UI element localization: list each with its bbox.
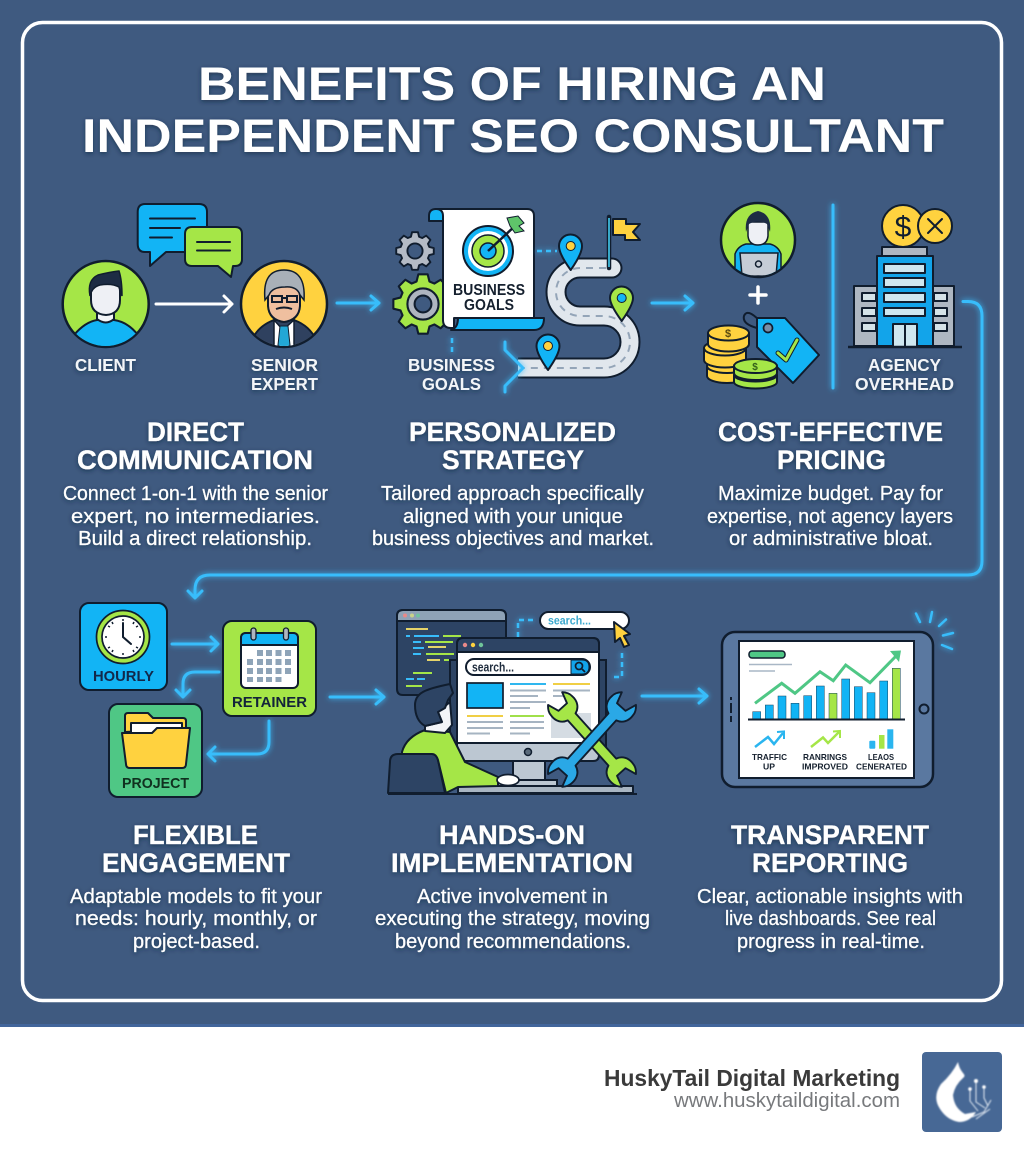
arrow: client to expert: [156, 296, 232, 312]
heading: cost-effective pricing: COST-EFFECTIVE: [718, 417, 943, 447]
panel: hands-on implementation: [375, 610, 650, 953]
text: cost-effective pricing description: [707, 483, 953, 550]
icon: green coin stack: $: [752, 362, 758, 373]
dashed connectors: [518, 620, 622, 677]
icon: code window: [397, 610, 506, 695]
text: flexible engagement description: Adaptable models to fit your: [70, 886, 322, 908]
text: flexible engagement description: needs: hourly, monthly, or: [75, 908, 317, 930]
text: hands-on implementation description: executing the strategy, moving: [375, 908, 650, 930]
label: agency overhead: OVERHEAD: [855, 374, 954, 394]
icon: senior expert avatar: [241, 261, 327, 352]
panel: flexible engagement: [70, 603, 322, 953]
card: hourly: HOURLY: [93, 668, 154, 685]
heading: hands-on implementation: HANDS-ON: [439, 820, 585, 850]
heading: cost-effective pricing: PRICING: [777, 445, 886, 475]
heading: transparent reporting: REPORTING: [752, 848, 908, 878]
tablet labels: UP: [763, 762, 775, 772]
footer band edge: [0, 1024, 1024, 1027]
icon: leads bars: [869, 729, 893, 749]
text: hands-on implementation description: [375, 886, 650, 953]
heading: hands-on implementation: [391, 820, 633, 878]
icon: agency building: [848, 247, 962, 347]
label: business goals: GOALS: [422, 374, 481, 394]
icon: floating search bar: [540, 612, 630, 647]
brand url: www.huskytaildigital.com: [673, 1090, 900, 1112]
heading: direct communication: COMMUNICATION: [77, 445, 313, 475]
text: transparent reporting description: Clear, actionable insights with: [697, 886, 963, 908]
text: personalized strategy description: aligned with your unique: [403, 506, 623, 528]
label: senior expert: [251, 355, 318, 394]
brand name: HuskyTail Digital Marketing: [604, 1065, 900, 1091]
text: cost-effective pricing description: expertise, not agency layers: [707, 506, 953, 528]
text: hands-on implementation description: Active involvement in: [417, 886, 608, 908]
icon: yellow coin stack: [704, 326, 749, 383]
icon: map pins: [536, 234, 633, 370]
tablet labels: LEAOS: [868, 752, 894, 762]
icon: plus sign: [750, 287, 766, 303]
label: senior expert: EXPERT: [251, 374, 318, 394]
heading: flexible engagement: [102, 820, 290, 878]
panel: cost-effective pricing: [704, 203, 962, 550]
icon: monitor: [450, 638, 606, 786]
footer: brand: [604, 1052, 1002, 1132]
icon: sparkle rays: [916, 612, 953, 649]
heading: flexible engagement: FLEXIBLE: [133, 820, 258, 850]
icon: floating search bar: search...: [548, 614, 591, 628]
text: transparent reporting description: progress in real-time.: [737, 931, 925, 953]
icon: business goals scroll: GOALS: [464, 297, 514, 314]
text: cost-effective pricing description: Maximize budget. Pay for: [718, 483, 943, 505]
icon: business goals scroll: [429, 209, 544, 330]
icon: gears: [393, 232, 453, 334]
panel: transparent reporting: [697, 612, 963, 953]
text: transparent reporting description: [697, 886, 963, 953]
tablet labels: RANRINGS: [803, 752, 847, 762]
icon: crossed wrenches: [544, 689, 640, 790]
icon: price tag with check: [744, 313, 819, 383]
title: [82, 57, 944, 162]
panel: personalized strategy: [372, 209, 654, 550]
tablet labels: TRAFFIC: [752, 752, 787, 762]
heading: transparent reporting: TRANSPARENT: [731, 820, 929, 850]
icon: yellow coin stack: $: [725, 328, 731, 340]
icon: dollar and cross coins: [882, 205, 952, 247]
card: retainer: [223, 621, 316, 716]
panel: direct communication: [63, 204, 328, 550]
text: personalized strategy description: [372, 483, 654, 550]
text: flexible engagement description: [70, 886, 322, 953]
label: client: CLIENT: [75, 355, 136, 375]
icon: tablet dashboard: [722, 632, 933, 787]
dashed connectors to road: [452, 251, 557, 352]
flow connectors: [172, 205, 982, 761]
heading: flexible engagement: ENGAGEMENT: [102, 848, 290, 878]
icon: traffic up: [755, 732, 784, 747]
text: direct communication description: Build a direct relationship.: [78, 528, 312, 550]
label: business goals: [408, 355, 495, 394]
label: agency overhead: [855, 355, 954, 394]
bar chart: [753, 668, 900, 719]
heading: direct communication: DIRECT: [147, 417, 244, 447]
icon: winding road: [518, 258, 630, 368]
icon: consultant with laptop: [721, 203, 795, 277]
title: INDEPENDENT SEO CONSULTANT: [82, 109, 944, 162]
heading: hands-on implementation: IMPLEMENTATION: [391, 848, 633, 878]
icon: dollar and cross coins: $: [895, 211, 912, 244]
heading: cost-effective pricing: [718, 417, 943, 475]
chevron at road start: [505, 342, 523, 392]
icon: business goals scroll: BUSINESS: [453, 282, 525, 299]
label: senior expert: SENIOR: [251, 355, 318, 375]
icon: goal flag: [609, 217, 640, 268]
text: direct communication description: Connect 1-on-1 with the senior: [63, 483, 328, 505]
heading: personalized strategy: [409, 417, 616, 475]
icon: husky tail logo: [922, 1052, 1002, 1132]
title: BENEFITS OF HIRING AN: [198, 57, 826, 110]
text: cost-effective pricing description: or administrative bloat.: [729, 528, 933, 550]
icon: speech bubbles: [138, 204, 242, 277]
icon: person at desk: [388, 684, 637, 794]
text: direct communication description: [63, 483, 328, 550]
icon: green coin stack: [734, 359, 777, 389]
text: flexible engagement description: project-based.: [133, 931, 260, 953]
card: hourly: [80, 603, 167, 690]
label: agency overhead: AGENCY: [868, 355, 941, 375]
card: project: PROJECT: [122, 775, 189, 792]
text: personalized strategy description: Tailored approach specifically: [381, 483, 644, 505]
text: direct communication description: expert, no intermediaries.: [71, 506, 320, 528]
text: personalized strategy description: business objectives and market.: [372, 528, 654, 550]
text: transparent reporting description: live dashboards. See real: [725, 908, 936, 930]
icon: rankings improved: [811, 731, 840, 747]
heading: personalized strategy: STRATEGY: [442, 445, 584, 475]
heading: personalized strategy: PERSONALIZED: [409, 417, 616, 447]
text: hands-on implementation description: beyond recommendations.: [395, 931, 631, 953]
icon: client avatar: [63, 261, 149, 352]
tablet labels: [752, 752, 907, 772]
heading: transparent reporting: [731, 820, 929, 878]
tablet labels: CENERATED: [856, 762, 907, 772]
label: business goals: BUSINESS: [408, 355, 495, 375]
icon: monitor: search...: [472, 660, 514, 674]
card: project: [109, 704, 202, 797]
line chart: [755, 654, 898, 703]
tablet labels: IMPROVED: [802, 762, 848, 772]
heading: direct communication: [77, 417, 313, 475]
card: retainer: RETAINER: [232, 694, 307, 711]
